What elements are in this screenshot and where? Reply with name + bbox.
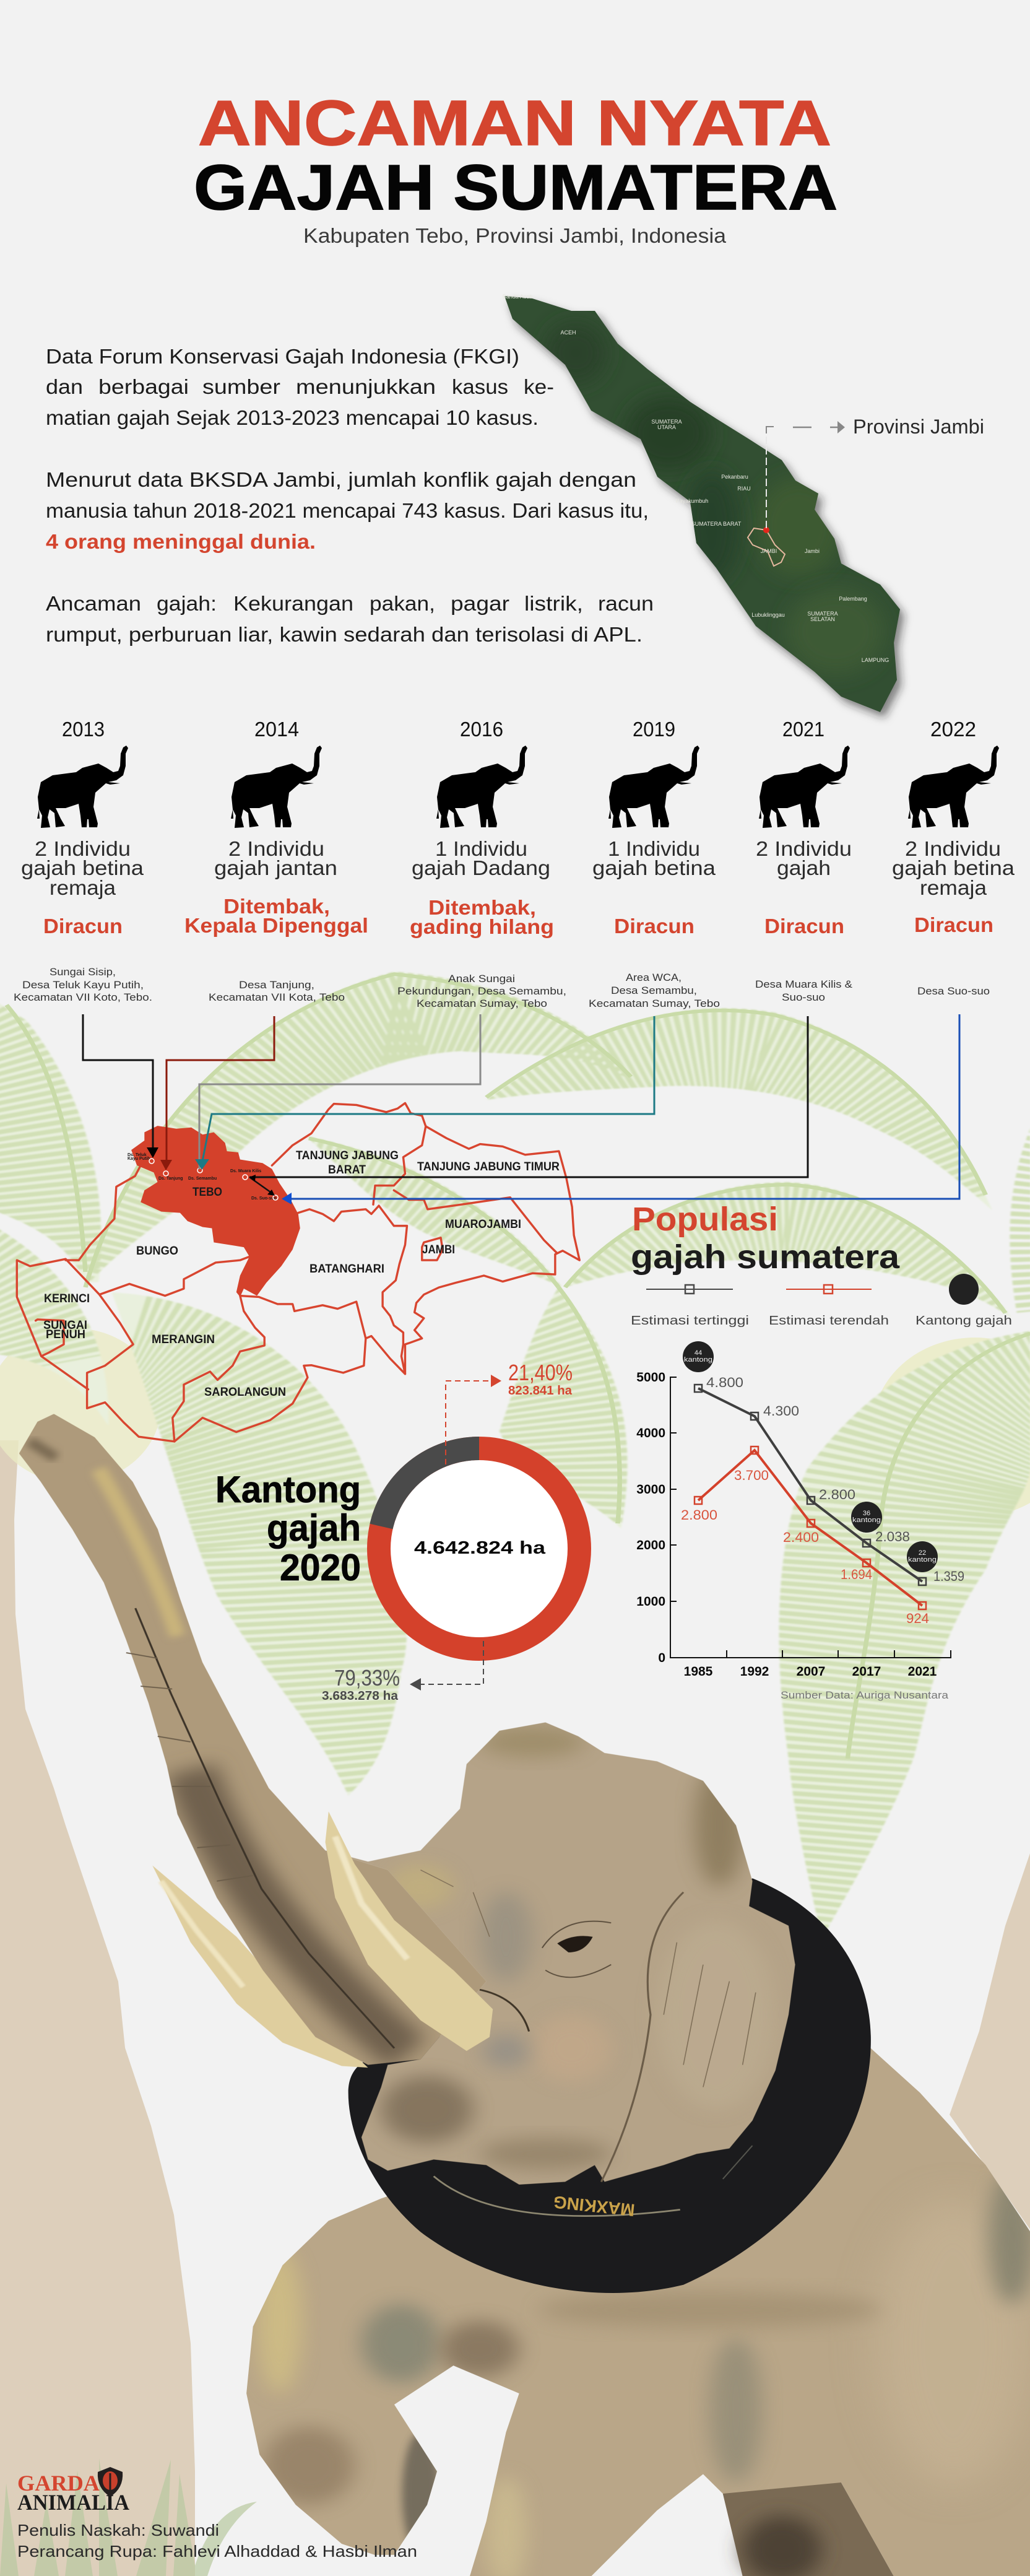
y axis labels: 0 bbox=[658, 1651, 665, 1665]
intro text block: manusia tahun 2018-2021 mencapai 743 kasus. Dari kasus itu, bbox=[46, 499, 649, 522]
timeline: 2014: 2014 bbox=[254, 718, 299, 741]
heading: kantong gajah 2020 bbox=[215, 1469, 361, 1588]
chart legend: Estimasi terendah bbox=[769, 1314, 889, 1328]
district labels bbox=[43, 1149, 560, 1399]
district labels: PENUH bbox=[46, 1328, 85, 1341]
intro text block: Data Forum Konservasi Gajah Indonesia (FKGI) bbox=[46, 345, 519, 368]
Provinsi Jambi callout: Provinsi Jambi bbox=[853, 416, 984, 438]
village markers bbox=[149, 1159, 278, 1200]
timeline: 2019: gajah betina bbox=[592, 856, 716, 879]
intro text block: sumber bbox=[202, 375, 280, 398]
connector 2014 bbox=[160, 1016, 274, 1170]
series: estimasi tertinggi bbox=[695, 1375, 964, 1585]
series: estimasi tertinggi: 4.300 bbox=[763, 1403, 799, 1419]
title: ANCAMAN NYATA bbox=[198, 87, 831, 159]
timeline: 2013: Diracun bbox=[43, 915, 123, 938]
series: estimasi terendah: 2.400 bbox=[783, 1530, 819, 1545]
logo: garda animalia bbox=[17, 2467, 129, 2515]
intro text block: matian gajah Sejak 2013-2023 mencapai 10 kasus. bbox=[46, 406, 539, 429]
satellite map of Sumatra: SUMATERA BARAT bbox=[691, 521, 742, 527]
timeline: 2019: 2019 bbox=[633, 718, 675, 741]
callout 79,33%: 79,33% bbox=[334, 1665, 400, 1690]
series: estimasi terendah: 1.694 bbox=[841, 1567, 872, 1582]
donut center value: 4.642.824 ha bbox=[414, 1538, 546, 1558]
timeline: 2021: Diracun bbox=[764, 915, 844, 938]
icon: elephant 2021 bbox=[759, 746, 850, 828]
title: GAJAH SUMATERA bbox=[194, 152, 837, 223]
satellite map of Sumatra: Jambi bbox=[805, 548, 820, 554]
kantong markers: kantong bbox=[684, 1356, 712, 1364]
y axis labels: 5000 bbox=[636, 1370, 665, 1385]
palm fronds background bbox=[0, 972, 1030, 1939]
credits: Perancang Rupa: Fahlevi Alhaddad & Hasbi Ilman bbox=[17, 2542, 417, 2561]
timeline: 2013: Sungai Sisip, bbox=[50, 966, 116, 978]
satellite map of Sumatra: UTARA bbox=[657, 424, 676, 430]
series: estimasi tertinggi: 2.038 bbox=[875, 1529, 910, 1544]
timeline: 2016: Anak Sungai bbox=[448, 973, 515, 985]
heading: kantong gajah 2020: 2020 bbox=[280, 1547, 361, 1588]
Jambi outline on satellite map bbox=[748, 528, 785, 566]
icon: elephant 2022 bbox=[908, 746, 999, 828]
kantong markers: 44 bbox=[695, 1349, 702, 1357]
intro text block: racun bbox=[598, 592, 654, 615]
timeline: 2022: gajah betina bbox=[892, 856, 1015, 879]
village labels: Ds. Muara Kilis bbox=[230, 1169, 261, 1173]
intro text block: dan bbox=[46, 375, 83, 398]
series: estimasi tertinggi: 4.800 bbox=[706, 1375, 743, 1390]
grass bbox=[0, 2458, 257, 2576]
icon: elephant 2014 bbox=[231, 746, 322, 828]
x axis labels: 2007 bbox=[797, 1664, 825, 1679]
x axis labels bbox=[684, 1664, 937, 1679]
district labels: BUNGO bbox=[136, 1245, 178, 1258]
y axis labels bbox=[636, 1370, 665, 1665]
icon: elephant 2019 bbox=[608, 746, 699, 828]
y axis labels: 4000 bbox=[636, 1426, 665, 1440]
timeline: 2021: 2021 bbox=[782, 718, 824, 741]
source note: Sumber Data: Auriga Nusantara bbox=[781, 1689, 949, 1701]
intro text block: menunjukkan bbox=[296, 375, 436, 398]
timeline: 2022: Diracun bbox=[914, 913, 993, 936]
palm trunks background bbox=[0, 1440, 1030, 2576]
chart legend: Kantong gajah bbox=[915, 1314, 1012, 1328]
intro text block: Menurut data BKSDA Jambi, jumlah konflik gajah dengan bbox=[46, 468, 636, 491]
timeline: 2022: remaja bbox=[920, 876, 987, 899]
district labels: SUNGAI bbox=[43, 1319, 87, 1332]
timeline: 2013: Desa Teluk Kayu Putih, bbox=[22, 979, 144, 991]
series: estimasi tertinggi: 1.359 bbox=[933, 1569, 964, 1584]
timeline: 2014: Kecamatan VII Kota, Tebo bbox=[209, 991, 345, 1003]
donut chart: kantong gajah 2020 bbox=[379, 1448, 579, 1649]
chart legend bbox=[631, 1274, 1012, 1328]
timeline: 2016: gading hilang bbox=[410, 915, 554, 938]
village labels: Ds. Tanjung bbox=[158, 1177, 183, 1181]
intro text block bbox=[46, 345, 654, 646]
series: estimasi tertinggi: 2.800 bbox=[819, 1487, 855, 1502]
timeline: 2019: Diracun bbox=[614, 915, 695, 938]
intro text block: rumput, perburuan liar, kawin sedarah dan terisolasi di APL. bbox=[46, 623, 643, 646]
timeline: 2014: Ditembak, bbox=[223, 895, 330, 918]
logo: garda animalia: ANIMALIA bbox=[17, 2490, 129, 2515]
intro text block: kasus bbox=[452, 375, 508, 398]
palm fruits background bbox=[0, 1328, 1030, 1517]
red location pin bbox=[763, 527, 769, 533]
connector 2013 bbox=[83, 1014, 158, 1158]
timeline: 2014: Kepala Dipenggal bbox=[184, 914, 368, 937]
tire brand text: MAXKING bbox=[553, 2192, 636, 2220]
icon: shield bbox=[98, 2467, 123, 2497]
illustration: elephant with tire bbox=[19, 1414, 1030, 2576]
village labels: Ds. Teluk bbox=[128, 1153, 147, 1157]
callout 21,40%: 823.841 ha bbox=[508, 1384, 573, 1398]
axes bbox=[670, 1377, 951, 1658]
intro text block: Ancaman bbox=[46, 592, 141, 615]
timeline: 2021 bbox=[755, 718, 853, 1003]
connector 2022 bbox=[282, 1014, 959, 1204]
elephant body bbox=[246, 2048, 1030, 2576]
heading: populasi gajah sumatera: Populasi bbox=[632, 1201, 778, 1238]
right tusk bbox=[325, 1811, 493, 2051]
intro text block: Kekurangan bbox=[233, 592, 353, 615]
intro text block: pagar bbox=[451, 592, 509, 615]
y axis labels: 3000 bbox=[636, 1482, 665, 1497]
timeline: 2013 bbox=[14, 718, 152, 1003]
Provinsi Jambi callout bbox=[766, 416, 984, 528]
intro text block: ke- bbox=[524, 375, 554, 398]
district labels: BATANGHARI bbox=[309, 1263, 384, 1276]
satellite map of Sumatra: LAMPUNG bbox=[862, 657, 889, 663]
timeline: 2013: Kecamatan VII Koto, Tebo. bbox=[14, 991, 152, 1003]
district outlines bbox=[17, 1103, 579, 1442]
credits bbox=[17, 2521, 417, 2561]
intro text block: 4 orang meninggal dunia. bbox=[46, 530, 316, 553]
timeline: 2022: Desa Suo-suo bbox=[917, 985, 990, 997]
timeline: 2016: Kecamatan Sumay, Tebo bbox=[417, 998, 547, 1009]
timeline: 2022: 2022 bbox=[930, 718, 976, 741]
satellite map of Sumatra: Payakumbuh bbox=[676, 498, 708, 504]
timeline: 2019: Kecamatan Sumay, Tebo bbox=[589, 998, 720, 1009]
timeline: 2016: 2016 bbox=[460, 718, 503, 741]
satellite map of Sumatra: SUMATERA bbox=[807, 611, 838, 617]
tire around the neck bbox=[348, 1878, 871, 2293]
district labels: KERINCI bbox=[44, 1292, 90, 1305]
timeline: 2013: gajah betina bbox=[21, 856, 144, 879]
timeline: 2016 bbox=[397, 718, 566, 1009]
timeline: 2022 bbox=[892, 718, 1015, 997]
connector 2021 bbox=[249, 1016, 808, 1196]
trunk bbox=[19, 1414, 487, 2065]
district labels: MERANGIN bbox=[152, 1333, 215, 1346]
district labels: JAMBI bbox=[422, 1243, 455, 1256]
timeline: 2019: Desa Semambu, bbox=[611, 985, 697, 996]
heading: kantong gajah 2020: gajah bbox=[267, 1507, 361, 1549]
elephant rear leg bbox=[723, 2455, 894, 2576]
callout 21,40%: 21,40% bbox=[508, 1360, 573, 1385]
x axis labels: 1985 bbox=[684, 1664, 713, 1679]
satellite map of Sumatra: Palembang bbox=[839, 596, 867, 602]
timeline: 2014: Desa Tanjung, bbox=[239, 979, 314, 991]
timeline: 2014 bbox=[184, 718, 368, 1003]
satellite map of Sumatra: Pekanbaru bbox=[721, 474, 748, 480]
x axis labels: 2021 bbox=[908, 1664, 937, 1679]
y axis labels: 1000 bbox=[636, 1595, 665, 1609]
series: estimasi terendah: 2.800 bbox=[681, 1507, 717, 1523]
satellite map of Sumatra: SELATAN bbox=[810, 616, 835, 622]
intro text block: pakan, bbox=[370, 592, 435, 615]
y axis labels: 2000 bbox=[636, 1538, 665, 1552]
heading: populasi gajah sumatera: gajah sumatera bbox=[631, 1238, 900, 1276]
kantong markers: kantong bbox=[908, 1556, 937, 1564]
x axis labels: 2017 bbox=[852, 1664, 881, 1679]
credits: Penulis Naskah: Suwandi bbox=[17, 2521, 219, 2539]
satellite map of Sumatra: JAMBI bbox=[761, 548, 777, 554]
district labels: BARAT bbox=[328, 1164, 366, 1177]
Tebo district highlighted bbox=[131, 1126, 300, 1297]
x axis labels: 1992 bbox=[740, 1664, 769, 1679]
satellite map of Sumatra: Lubuklinggau bbox=[751, 612, 785, 618]
village labels bbox=[128, 1153, 277, 1201]
timeline: 2019: Area WCA, bbox=[626, 972, 682, 983]
callout 21,40% bbox=[446, 1360, 573, 1464]
timeline: 2019 bbox=[589, 718, 720, 1009]
timeline: 2016: gajah Dadang bbox=[412, 856, 550, 879]
eye bbox=[557, 1936, 593, 1952]
connector 2019 bbox=[195, 1016, 654, 1170]
icon: elephant 2016 bbox=[436, 746, 527, 828]
kantong markers: 22 bbox=[919, 1549, 926, 1557]
satellite map of Sumatra bbox=[503, 294, 900, 712]
timeline: 2021: Suo-suo bbox=[782, 991, 825, 1003]
timeline: 2014: gajah jantan bbox=[214, 856, 337, 879]
timeline: 2013: remaja bbox=[50, 876, 116, 899]
series: estimasi terendah: 3.700 bbox=[734, 1468, 769, 1483]
logo: garda animalia: GARDA bbox=[17, 2471, 100, 2496]
timeline: 2016: Pekundungan, Desa Semambu, bbox=[397, 985, 566, 997]
kantong markers bbox=[683, 1341, 938, 1572]
icon: elephant 2013 bbox=[37, 746, 128, 828]
timeline: 2013: 2 Individu bbox=[35, 837, 131, 860]
village labels: Kayu Putih bbox=[128, 1157, 150, 1161]
kantong markers: 36 bbox=[863, 1510, 870, 1517]
intro text block: gajah: bbox=[157, 592, 217, 615]
line chart: populasi bbox=[636, 1341, 964, 1679]
satellite map of Sumatra: SUMATERA bbox=[651, 419, 682, 425]
satellite map of Sumatra: ACEH bbox=[560, 329, 576, 336]
satellite map of Sumatra: Banda Aceh bbox=[503, 294, 532, 300]
district labels: TANJUNG JABUNG bbox=[296, 1149, 399, 1162]
callout 79,33% bbox=[322, 1641, 483, 1703]
timeline: 2021: 2 Individu bbox=[756, 837, 852, 860]
district labels: TEBO bbox=[193, 1186, 222, 1199]
series: estimasi terendah: 924 bbox=[906, 1611, 929, 1626]
title bbox=[194, 87, 837, 223]
series: estimasi terendah bbox=[681, 1447, 929, 1626]
timeline: 2019: 1 Individu bbox=[608, 837, 700, 860]
satellite map of Sumatra: RIAU bbox=[737, 485, 751, 492]
village labels: Ds. Semambu bbox=[188, 1177, 217, 1181]
heading: populasi gajah sumatera bbox=[631, 1201, 900, 1276]
timeline: 2013: 2013 bbox=[62, 718, 105, 741]
heading: kantong gajah 2020: Kantong bbox=[215, 1469, 361, 1510]
intro text block: listrik, bbox=[524, 592, 583, 615]
district labels: MUAROJAMBI bbox=[445, 1218, 521, 1231]
village labels: Ds. Suo-suo bbox=[251, 1196, 277, 1201]
connector 2016 bbox=[199, 1014, 480, 1169]
timeline: 2021: Desa Muara Kilis & bbox=[755, 978, 853, 990]
chart legend: Estimasi tertinggi bbox=[631, 1314, 749, 1328]
intro text block: berbagai bbox=[98, 375, 189, 398]
district labels: TANJUNG JABUNG TIMUR bbox=[417, 1160, 560, 1173]
donut dark segment bbox=[381, 1448, 479, 1526]
timeline: 2022: 2 Individu bbox=[905, 837, 1001, 860]
left tusk bbox=[152, 1866, 368, 2068]
timeline: 2021: gajah bbox=[777, 856, 831, 879]
district labels: SAROLANGUN bbox=[204, 1386, 286, 1399]
subtitle: Kabupaten Tebo, Provinsi Jambi, Indonesia bbox=[303, 224, 727, 247]
callout 79,33%: 3.683.278 ha bbox=[322, 1689, 399, 1703]
timeline: 2016: Ditembak, bbox=[428, 896, 536, 919]
map of Jambi province bbox=[17, 1103, 579, 1442]
timeline: 2014: 2 Individu bbox=[228, 837, 324, 860]
head bbox=[325, 1722, 795, 2185]
kantong markers: kantong bbox=[852, 1516, 881, 1524]
timeline: 2016: 1 Individu bbox=[435, 837, 527, 860]
